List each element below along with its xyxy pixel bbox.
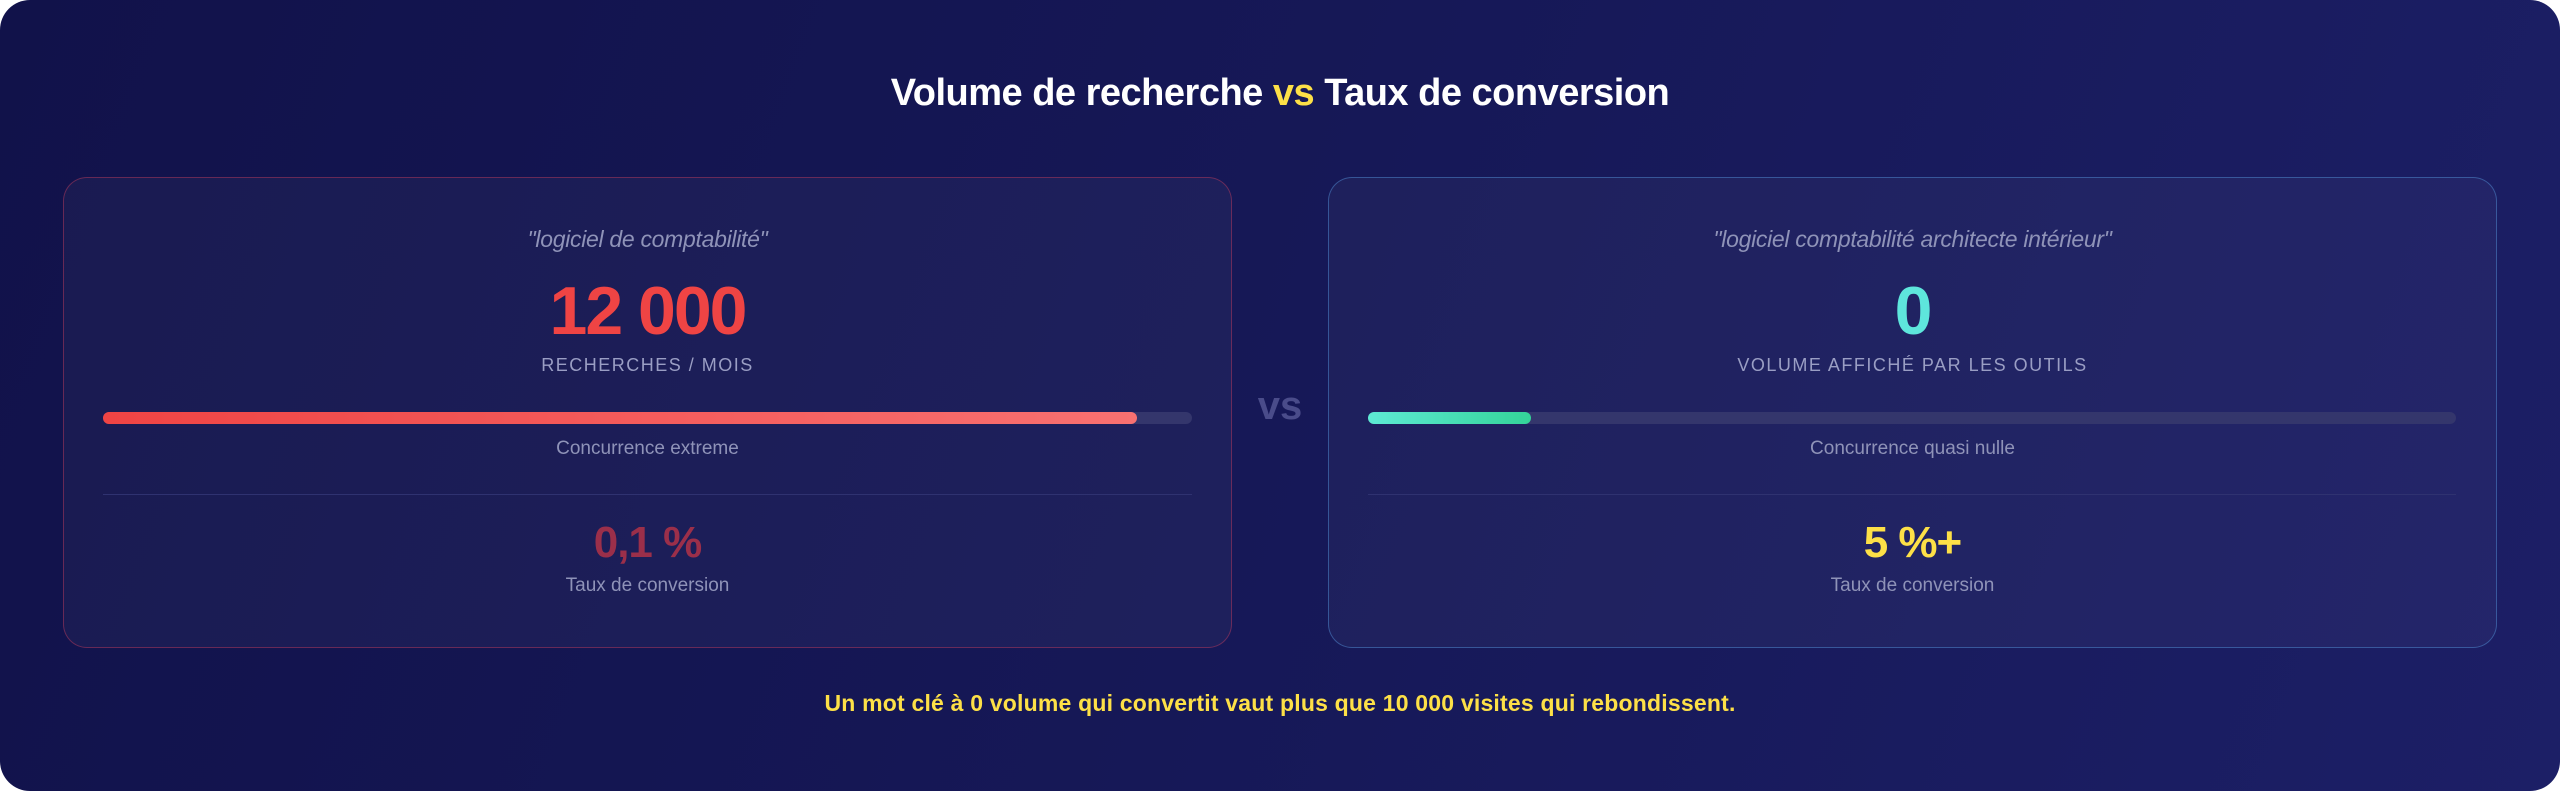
bar left xyxy=(103,412,1192,424)
conversion label left: Taux de conversion xyxy=(566,575,729,596)
competition left: Concurrence extreme xyxy=(556,438,739,459)
label left: RECHERCHES / MOIS xyxy=(541,355,754,375)
big number right: 0 xyxy=(1895,273,1930,349)
conversion left: 0,1 % xyxy=(594,518,701,567)
conversion right: 5 %+ xyxy=(1864,518,1961,567)
bar right xyxy=(1368,412,2456,424)
footer callout: Un mot clé à 0 volume qui convertit vaut plus que 10 000 visites qui rebondissent. xyxy=(824,690,1736,716)
big number left: 12 000 xyxy=(550,273,745,349)
panel: left content xyxy=(103,226,1192,596)
keyword quote left: "logiciel de comptabilité" xyxy=(528,226,767,252)
label right: VOLUME AFFICHÉ PAR LES OUTILS xyxy=(1737,355,2088,375)
competition right: Concurrence quasi nulle xyxy=(1810,438,2015,459)
panel: left card background xyxy=(63,177,1232,648)
vs divider: vs xyxy=(1258,384,1302,428)
keyword quote right: "logiciel comptabilité architecte intérieur" xyxy=(1713,226,2112,252)
conversion label right: Taux de conversion xyxy=(1831,575,1994,596)
panel: right card background xyxy=(1328,177,2497,648)
panel: right content xyxy=(1368,226,2456,596)
title: Volume de recherche vs Taux de conversion xyxy=(891,72,1669,114)
